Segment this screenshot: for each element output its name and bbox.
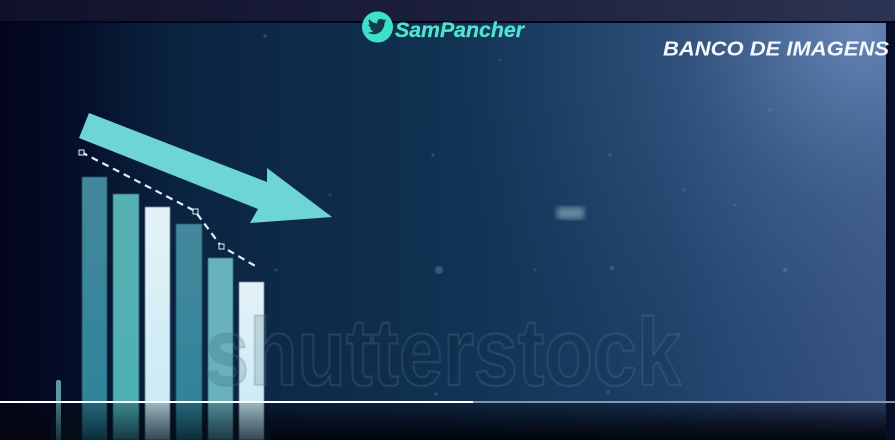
blurred glowing rectangle	[557, 207, 584, 219]
watermark: shutterstock: shutterstock	[205, 299, 682, 406]
bar chart	[82, 177, 264, 440]
small left bar	[56, 380, 61, 440]
bar 5	[208, 258, 233, 440]
handle text: SamPancher	[395, 19, 526, 42]
bar 1	[82, 177, 107, 440]
caption: banco de imagens: BANCO DE IMAGENS	[663, 38, 889, 60]
scattered particles	[264, 34, 787, 396]
bar 2	[113, 194, 139, 440]
bar 4	[176, 224, 202, 440]
bar reflection fade	[50, 403, 270, 440]
header divider line	[0, 21, 895, 23]
bar 6	[239, 282, 264, 440]
top band	[0, 0, 895, 22]
arrow: downward trend	[79, 113, 332, 223]
twitter handle badge	[362, 12, 526, 42]
dashed trend line	[79, 150, 257, 267]
progress bar	[0, 401, 895, 403]
icon: twitter circle	[362, 12, 393, 42]
bar 3	[145, 207, 170, 440]
